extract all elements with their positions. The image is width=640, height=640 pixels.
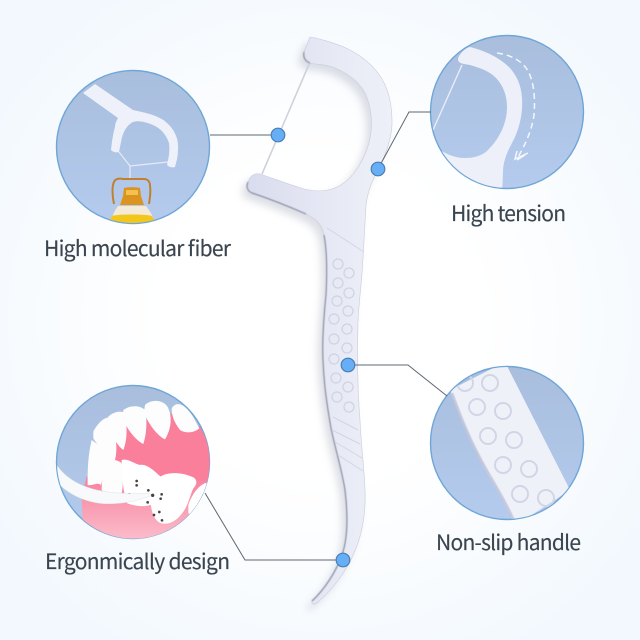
pick drop shadow	[242, 43, 387, 610]
disc contents	[55, 401, 213, 547]
floss string	[433, 65, 462, 130]
label: non-slip handle: Non-slip handle	[436, 527, 581, 557]
panel: ergonomically design	[55, 386, 213, 547]
disc contents	[450, 362, 570, 526]
tooth: incisor	[144, 401, 171, 439]
tooth: premolar	[93, 417, 116, 460]
icon: pick arc	[440, 47, 522, 195]
disc	[430, 36, 584, 188]
label: high molecular fiber: High molecular fiber	[44, 233, 232, 263]
panel: high tension	[430, 36, 584, 195]
panel: non-slip handle	[430, 362, 584, 526]
pick tip flossing	[55, 465, 151, 504]
tooth: molar left	[122, 460, 161, 506]
tooth: lateral	[123, 406, 146, 444]
handle dots	[457, 375, 554, 506]
bottle oil	[110, 214, 154, 223]
callout line: high tension	[378, 112, 431, 169]
tooth: far right incisor	[172, 404, 199, 432]
floss pick illustration	[242, 37, 392, 610]
disc	[56, 386, 210, 538]
bottle handle	[112, 179, 150, 204]
front teeth	[122, 460, 207, 524]
pick dark edge	[247, 52, 347, 601]
callout line: non-slip handle	[348, 365, 447, 396]
callout line: ergonomically design	[205, 493, 343, 560]
tooth: back molar	[102, 460, 123, 494]
upper teeth arch	[88, 401, 199, 494]
icon: oil bottle	[110, 178, 154, 223]
floss string	[262, 62, 310, 174]
marker: floss	[271, 128, 285, 142]
label: high tension: High tension	[451, 198, 566, 228]
bottle neck	[112, 206, 153, 218]
handle dark edge	[452, 393, 514, 521]
marker: arc	[371, 162, 385, 176]
label: ergonomically design: Ergonmically design	[45, 546, 230, 576]
callout line: high molecular fiber	[210, 134, 278, 136]
disc contents	[433, 47, 534, 195]
lower gum	[82, 476, 206, 539]
icon: pick head	[83, 84, 178, 167]
tooth: canine	[107, 412, 127, 450]
marker: tip	[336, 553, 350, 567]
disc	[430, 366, 584, 520]
upper gum	[114, 414, 210, 486]
pick body	[247, 37, 392, 604]
non-slip dots on handle	[329, 259, 354, 412]
panel: high molecular fiber	[56, 70, 210, 228]
handle close-up	[450, 362, 570, 526]
floss knot	[119, 152, 168, 178]
marker: handle	[341, 358, 355, 372]
dashed arrow	[497, 53, 534, 157]
arrow head	[515, 151, 528, 160]
plaque specks	[128, 480, 163, 522]
tooth: side tooth	[188, 483, 207, 517]
tooth: molar right	[151, 473, 196, 524]
bottle cap	[120, 187, 144, 205]
disc contents	[83, 84, 178, 228]
tooth: back premolar	[88, 440, 115, 485]
disc	[56, 70, 210, 224]
grip ridges	[327, 228, 364, 471]
